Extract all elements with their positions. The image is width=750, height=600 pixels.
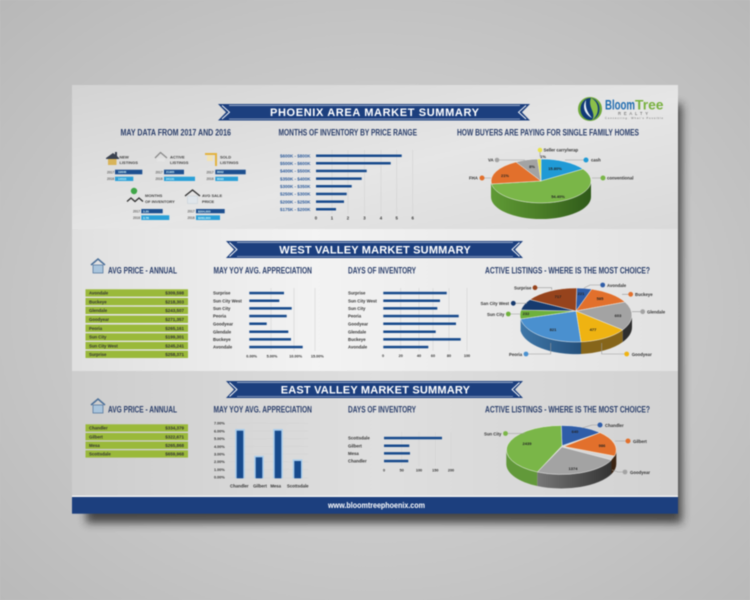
footer bar <box>72 496 678 514</box>
bar chart: West Valley days of inventory: 100 <box>464 354 470 358</box>
stat: active listings: 21905 <box>166 170 175 174</box>
bar chart: West Valley appreciation: 10.00% <box>289 354 303 358</box>
stat: new listings: 19646 <box>118 170 127 174</box>
bar chart: East Valley days of inventory: 150 <box>432 469 438 473</box>
pie chart: West Valley active listings: Avondale <box>607 283 627 288</box>
table: average price annual: Sun City <box>89 335 107 340</box>
bar chart: West Valley appreciation: Peoria <box>213 314 227 319</box>
pie chart: West Valley active listings: 603 <box>615 313 622 318</box>
table: average price annual: $334,379 <box>165 426 184 431</box>
icon: house <box>91 259 105 273</box>
column chart: East Valley appreciation: 1.00% <box>214 468 225 472</box>
bar chart: East Valley days of inventory: Gilbert <box>348 443 362 448</box>
heading: active listings: ACTIVE LISTINGS - WHERE IS THE MOST CHOICE? <box>485 266 650 277</box>
table: average price annual: $265,161 <box>165 326 184 331</box>
bar chart: West Valley appreciation: 15.00% <box>311 354 324 358</box>
stat: average sale price: AVG SALE <box>202 193 222 198</box>
pie chart: West Valley active listings: 821 <box>550 327 557 332</box>
column chart: East Valley appreciation: Mesa <box>270 484 282 488</box>
bar chart: West Valley appreciation <box>213 288 324 358</box>
stat: new listings <box>106 152 142 181</box>
table: average price annual: $271,357 <box>165 317 184 322</box>
table: average price annual: Sun City West <box>89 343 118 348</box>
table: average price annual <box>86 289 188 358</box>
pie chart: how buyers are paying: Seller carry/wrap <box>544 148 579 152</box>
table: average price annual: $322,671 <box>165 434 184 439</box>
bar chart: West Valley appreciation: 5.00% <box>267 354 278 358</box>
column chart: East Valley appreciation: 7.00% <box>214 422 225 426</box>
stat: active listings: ACTIVE <box>170 154 185 160</box>
bar chart: East Valley days of inventory: 50 <box>400 469 404 473</box>
pie chart: how buyers are paying: 1% <box>540 154 546 159</box>
bar chart: West Valley days of inventory: Surprise <box>348 291 366 296</box>
stat: average sale price: $304,000 <box>198 209 211 213</box>
stat: sold listings: 8662 <box>217 170 224 174</box>
table: average price annual: $243,507 <box>165 308 184 313</box>
bar chart: West Valley appreciation: Glendale <box>213 329 232 334</box>
table: average price annual: Chandler <box>89 426 108 431</box>
pie chart: East Valley active listings: Chandler <box>605 423 624 428</box>
pie chart: how buyers are paying: cash <box>591 158 601 162</box>
bar chart: East Valley days of inventory: 200 <box>448 469 454 473</box>
stat: sold listings: SOLD <box>220 154 231 160</box>
table: average price annual: Peoria <box>89 326 103 331</box>
column chart: East Valley appreciation: Gilbert <box>253 484 267 488</box>
stat: sold listings: 2016 <box>206 177 214 181</box>
bar chart: months of inventory by price range: $500K - $600K <box>280 161 311 166</box>
bar chart: West Valley days of inventory: 40 <box>417 354 421 358</box>
column chart: East Valley appreciation: 5.00% <box>214 437 225 441</box>
table: average price annual: Buckeye <box>89 299 107 304</box>
bar chart: months of inventory by price range: 5 <box>396 216 399 220</box>
bar chart: months of inventory by price range: $200K - $250K <box>280 199 311 204</box>
pie chart: how buyers are paying: conventional <box>607 176 634 180</box>
pie chart: East Valley active listings: 640 <box>572 429 579 434</box>
stat: months of inventory: OF INVENTORY <box>145 199 175 204</box>
heading: May data: MAY DATA FROM 2017 AND 2016 <box>120 128 231 139</box>
heading: appreciation: MAY YOY AVG. APPRECIATION <box>214 266 312 277</box>
column chart: East Valley appreciation: 2.00% <box>214 460 225 464</box>
pie chart: West Valley active listings: San City West <box>480 301 510 306</box>
stat: new listings: NEW <box>120 154 129 160</box>
table: average price annual: $245,241 <box>165 343 184 348</box>
logo: BloomTree Realty: Tree <box>635 98 664 112</box>
stat: months of inventory: 3.78 <box>143 216 149 220</box>
bar chart: months of inventory by price range: $600K - $800K <box>280 154 311 158</box>
column chart: East Valley appreciation: Scottsdale <box>287 484 309 488</box>
bar chart: West Valley days of inventory: Goodyear <box>348 321 368 326</box>
stat: active listings: 2017 <box>156 170 163 174</box>
heading: average price: AVG PRICE - ANNUAL <box>108 405 177 416</box>
bar chart: West Valley days of inventory: 60 <box>431 354 435 358</box>
bar chart: months of inventory by price range: 1 <box>331 216 334 220</box>
logo: BloomTree Realty: Connecting. What's Possible <box>605 116 664 120</box>
stat: active listings: 2016 <box>156 177 163 181</box>
pie chart: how buyers are paying: 8% <box>529 164 535 169</box>
stat: average sale price: $283,000 <box>198 216 211 220</box>
pie chart: East Valley active listings: 986 <box>599 443 606 448</box>
bar chart: months of inventory by price range: 3 <box>363 216 366 220</box>
banner: West Valley Market Summary: WEST VALLEY MARKET SUMMARY <box>279 244 471 256</box>
bar chart: West Valley days of inventory: Sun City <box>348 306 366 311</box>
bar chart: West Valley days of inventory: Peoria <box>348 314 362 319</box>
banner: East Valley Market Summary: EAST VALLEY MARKET SUMMARY <box>281 384 471 396</box>
stat: new listings: 2016 <box>107 177 114 181</box>
table: average price annual: Goodyear <box>89 317 109 322</box>
pie chart: how buyers are paying <box>469 148 634 219</box>
banner: East Valley Market Summary <box>226 381 523 398</box>
logo: BloomTree Realty <box>578 97 664 121</box>
stat: average sale price <box>185 190 225 220</box>
bar chart: months of inventory by price range: $175K - $200K <box>280 207 311 212</box>
bar chart: West Valley days of inventory <box>348 288 470 358</box>
stat: new listings: LISTINGS <box>120 160 138 165</box>
bar chart: West Valley appreciation: Sun City West <box>213 298 242 303</box>
bar chart: West Valley days of inventory: Buckeye <box>348 337 366 342</box>
stat: average sale price: PRICE <box>202 199 215 204</box>
heading: days of inventory: DAYS OF INVENTORY <box>348 405 416 416</box>
stat: average sale price: 2017 <box>188 209 195 213</box>
bar chart: West Valley days of inventory: 80 <box>447 354 451 358</box>
stat: active listings: 24131 <box>166 177 175 181</box>
bar chart: months of inventory by price range: 2 <box>347 216 350 220</box>
bar chart: months of inventory by price range: $350K - $400K <box>280 176 311 181</box>
pie chart: how buyers are paying: 15.80% <box>548 166 562 171</box>
heading: days of inventory: DAYS OF INVENTORY <box>348 266 416 277</box>
pie chart: West Valley active listings: 221 <box>578 291 585 296</box>
table: average price annual: $659,968 <box>165 452 184 457</box>
banner: Phoenix Area Market Summary: PHOENIX AREA MARKET SUMMARY <box>270 107 480 119</box>
bar chart: months of inventory by price range: 4 <box>380 216 383 220</box>
pie chart: how buyers are paying: FHA <box>469 176 478 180</box>
bar chart: East Valley days of inventory: 100 <box>416 469 422 473</box>
bar chart: months of inventory by price range <box>280 150 415 220</box>
column chart: East Valley appreciation: 0.00% <box>214 476 225 480</box>
bar chart: months of inventory by price range: $400K - $500K <box>280 169 311 174</box>
table: average price annual: Glendale <box>89 308 108 313</box>
bar chart: West Valley days of inventory: 0 <box>382 354 384 358</box>
table: average price annual: $218,303 <box>165 299 184 304</box>
pie chart: West Valley active listings: Surprise <box>514 286 532 290</box>
stat: sold listings: 2017 <box>206 170 214 174</box>
bar chart: West Valley appreciation: Goodyear <box>213 321 233 326</box>
logo: BloomTree Realty: Bloom <box>605 98 635 112</box>
bar chart: East Valley days of inventory <box>348 432 454 473</box>
panel: Phoenix area <box>72 85 678 229</box>
icon: house <box>91 399 105 413</box>
stat: months of inventory: 2017 <box>133 209 140 213</box>
column chart: East Valley appreciation: 4.00% <box>214 445 225 449</box>
stat: months of inventory: 2016 <box>133 216 140 220</box>
bar chart: months of inventory by price range: 6 <box>412 216 415 220</box>
table: average price annual: Mesa <box>89 443 100 448</box>
bar chart: West Valley days of inventory: Avondale <box>348 345 368 350</box>
stat: months of inventory: 3.20 <box>143 209 149 213</box>
heading: average price: AVG PRICE - ANNUAL <box>108 266 177 277</box>
column chart: East Valley appreciation: 3.00% <box>214 452 225 456</box>
banner: West Valley Market Summary <box>226 241 523 258</box>
stat: sold listings <box>205 153 246 181</box>
stat: sold listings: 8093 <box>217 177 224 181</box>
pie chart: West Valley active listings: Peoria <box>509 352 523 357</box>
table: average price annual: Surprise <box>89 352 107 357</box>
pie chart: how buyers are paying: 21% <box>501 173 509 178</box>
pie chart: how buyers are paying: VA <box>488 158 494 162</box>
bar chart: West Valley appreciation: 0.00% <box>246 354 258 358</box>
bar chart: West Valley appreciation: Avondale <box>213 345 233 350</box>
pie chart: West Valley active listings: 585 <box>597 296 604 301</box>
bar chart: West Valley days of inventory: 20 <box>399 354 403 358</box>
pie chart: East Valley active listings: 1374 <box>569 466 578 471</box>
pie chart: West Valley active listings: 232 <box>523 311 530 316</box>
bar chart: months of inventory by price range: 0 <box>315 216 318 220</box>
bar chart: East Valley days of inventory: Mesa <box>348 451 359 456</box>
table: average price annual: $265,868 <box>165 443 184 448</box>
column chart: East Valley appreciation <box>214 422 309 488</box>
table: average price annual: Scottsdale <box>89 452 111 457</box>
stat: active listings <box>155 152 195 181</box>
stat: average sale price: 2016 <box>188 216 195 220</box>
bar chart: West Valley days of inventory: Glendale <box>348 329 367 334</box>
pie chart: East Valley active listings: 2439 <box>523 441 532 446</box>
pie chart: West Valley active listings: Glendale <box>647 310 666 314</box>
heading: appreciation: MAY YOY AVG. APPRECIATION <box>214 405 312 416</box>
stat: months of inventory: MONTHS <box>145 193 163 198</box>
pie chart: how buyers are paying: 54.40% <box>551 194 565 199</box>
pie chart: West Valley active listings: 477 <box>590 327 597 332</box>
stat: new listings: 2017 <box>107 170 114 174</box>
stat: sold listings: LISTINGS <box>220 160 239 165</box>
pie chart: West Valley active listings <box>480 283 666 357</box>
logo: BloomTree Realty: REALTY <box>618 111 648 116</box>
bar chart: months of inventory by price range: $250K - $300K <box>280 192 311 197</box>
table: average price annual: Gilbert <box>89 434 103 439</box>
column chart: East Valley appreciation: Chandler <box>230 484 249 488</box>
pie chart: East Valley active listings: Sun City <box>484 431 502 436</box>
table: average price annual: Avondale <box>89 291 109 296</box>
footer bar: www.bloomtreephoenix.com <box>327 500 425 510</box>
column chart: East Valley appreciation: 6.00% <box>214 429 225 433</box>
table: average price annual: $309,598 <box>165 291 184 296</box>
heading: how buyers are paying: HOW BUYERS ARE PAYING FOR SINGLE FAMILY HOMES <box>457 128 639 139</box>
panel: East Valley <box>72 371 678 497</box>
bar chart: months of inventory by price range: $300K - $350K <box>280 184 311 189</box>
bar chart: East Valley days of inventory: 0 <box>383 469 385 473</box>
stat: new listings: 14515 <box>118 177 127 181</box>
bar chart: West Valley appreciation: Surprise <box>213 291 231 296</box>
pie chart: West Valley active listings: 717 <box>555 294 562 299</box>
pie chart: East Valley active listings: Goodyear <box>630 470 650 475</box>
bar chart: East Valley days of inventory: Scottsdale <box>348 436 370 441</box>
panel: West Valley <box>72 229 678 371</box>
bar chart: West Valley appreciation: Buckeye <box>213 337 231 342</box>
pie chart: West Valley active listings: Buckeye <box>635 292 653 297</box>
table: average price annual: $258,371 <box>165 352 184 357</box>
table: average price annual: $199,301 <box>165 335 184 340</box>
pie chart: East Valley active listings <box>484 422 650 488</box>
pie chart: East Valley active listings: Gilbert <box>633 439 647 444</box>
pie chart: West Valley active listings: Goodyear <box>632 352 652 357</box>
bar chart: East Valley days of inventory: Chandler <box>348 459 367 464</box>
banner: Phoenix Area Market Summary <box>218 104 530 120</box>
heading: months of inventory: MONTHS OF INVENTORY BY PRICE RANGE <box>278 128 417 139</box>
bar chart: West Valley appreciation: Sun City <box>213 306 231 311</box>
pie chart: West Valley active listings: Sun City <box>487 312 505 317</box>
card shadow <box>86 104 682 523</box>
stat: active listings: LISTINGS <box>170 160 189 165</box>
stat: months of inventory <box>127 188 175 220</box>
table: average price annual <box>86 424 188 458</box>
bar chart: West Valley days of inventory: Sun City West <box>348 298 377 303</box>
heading: active listings: ACTIVE LISTINGS - WHERE IS THE MOST CHOICE? <box>485 405 650 416</box>
